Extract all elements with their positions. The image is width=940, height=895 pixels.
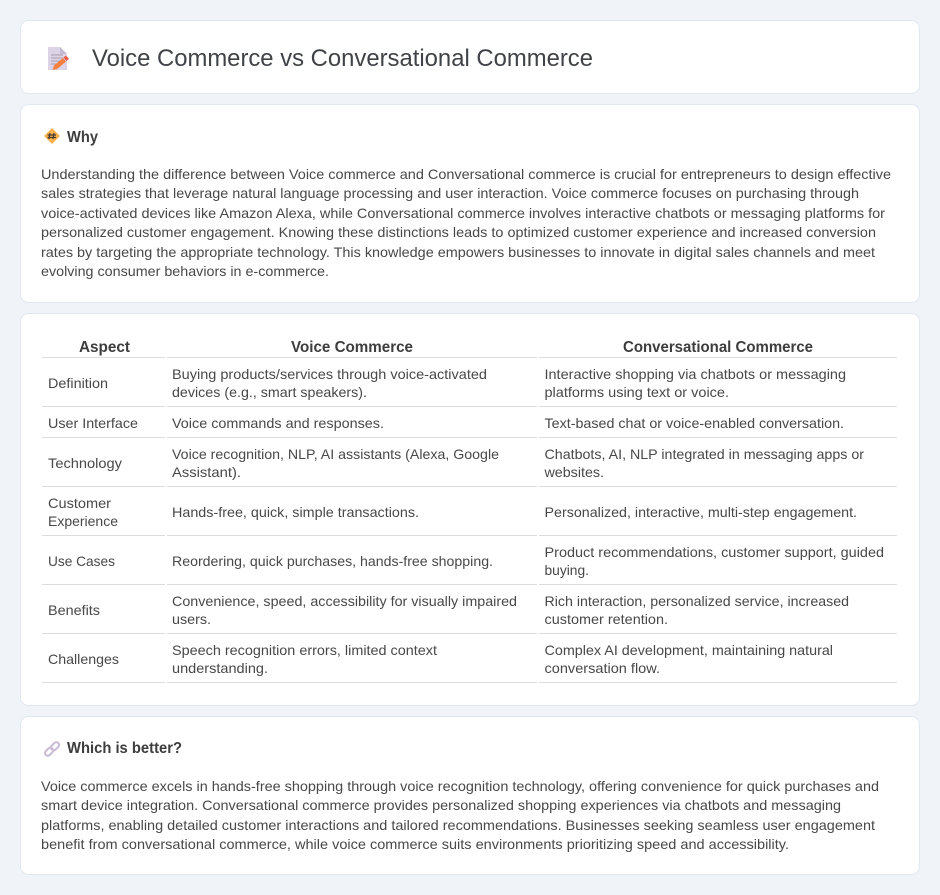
row: customer experience: Personalized, interactive, multi-step engagement.	[544, 504, 857, 520]
row: benefits: Rich interaction, personalized service, increased	[544, 593, 849, 609]
row: use cases: buying.	[544, 562, 589, 578]
text block: which is better paragraph: smart device integration. Conversational commerce provides personalized shopping experiences via chatbots and messaging	[41, 797, 841, 813]
text block: which is better paragraph: Voice commerce excels in hands-free shopping through voice recognition technology, offering convenience for quick purchases and	[41, 778, 879, 794]
icon: document with pencil	[48, 47, 69, 70]
row: challenges	[48, 642, 833, 676]
row: customer experience: Hands-free, quick, simple transactions.	[172, 504, 419, 520]
row: challenges: conversation flow.	[544, 660, 660, 676]
row: benefits: Benefits	[48, 602, 100, 618]
row: definition: Buying products/services through voice-activated	[172, 366, 487, 382]
text block: why paragraph: rates by targeting the appropriate technology. This knowledge empowers businesses to innovate in digital sales channels and meet	[41, 244, 875, 260]
row: definition: Interactive shopping via chatbots or messaging	[544, 366, 846, 382]
row: benefits: Convenience, speed, accessibility for visually impaired	[172, 593, 517, 609]
row: customer experience: Customer	[48, 495, 111, 511]
panel: why	[20, 104, 920, 302]
panel: title header	[20, 20, 920, 94]
table header row: Conversational Commerce	[623, 339, 813, 356]
row: user interface: User Interface	[48, 415, 138, 431]
row: definition: platforms using text or voice.	[544, 384, 729, 400]
icon: chain link	[44, 741, 60, 757]
text block: why paragraph: voice-activated devices like Amazon Alexa, while Conversational commerce involves interactive chatbots or messaging platforms for	[41, 205, 885, 221]
text block: why paragraph: sales strategies that leverage natural language processing and user interaction. Voice commerce focuses on purchasing through	[41, 185, 859, 201]
row: technology	[48, 446, 864, 480]
row: technology: Technology	[48, 455, 122, 471]
row: challenges: Complex AI development, maintaining natural	[544, 642, 833, 658]
text block: why paragraph: evolving consumer behaviors in e-commerce.	[41, 263, 329, 279]
panel: which is better	[20, 716, 920, 874]
row: benefits: users.	[172, 611, 211, 627]
row: customer experience: Experience	[48, 513, 118, 529]
text block: which is better paragraph: platforms, enabling detailed customer interactions and tailored recommendations. Businesses seeking seamless user engagement	[41, 817, 875, 833]
table header row: Aspect	[79, 339, 131, 356]
text block: why paragraph: Understanding the difference between Voice commerce and Conversational commerce is crucial for entrepreneurs to design effective	[41, 166, 891, 182]
row: technology: websites.	[543, 464, 604, 480]
text block: why paragraph	[41, 166, 891, 279]
row: use cases: Product recommendations, customer support, guided	[544, 544, 884, 560]
row: definition: Definition	[48, 375, 108, 391]
row: benefits	[48, 593, 849, 627]
row: use cases	[48, 544, 884, 578]
row: challenges: understanding.	[172, 660, 268, 676]
text block: which is better paragraph: benefit from conversational commerce, while voice commerce suits environments prioritizing speed and accessibility.	[41, 836, 789, 852]
row: user interface: Text-based chat or voice-enabled conversation.	[544, 415, 844, 431]
title: Voice Commerce vs Conversational Commerce	[92, 45, 593, 72]
row: use cases: Use Cases	[48, 553, 115, 569]
icon: diamond road sign	[44, 128, 60, 144]
row: benefits: customer retention.	[544, 611, 668, 627]
text block: why paragraph: personalized customer engagement. Knowing these distinctions leads to optimized customer experience and increased conversion	[41, 224, 876, 240]
row: challenges: Challenges	[48, 651, 119, 667]
text block: which is better paragraph	[41, 778, 879, 852]
row: technology: Voice recognition, NLP, AI assistants (Alexa, Google	[172, 446, 499, 462]
heading: why: Why	[67, 129, 98, 146]
row: technology: Assistant).	[172, 464, 241, 480]
panel: comparison table	[20, 314, 920, 706]
row: challenges: Speech recognition errors, limited context	[172, 642, 437, 658]
row: user interface	[48, 415, 844, 431]
table header row	[79, 339, 813, 356]
row: technology: Chatbots, AI, NLP integrated in messaging apps or	[544, 446, 864, 462]
row: definition: devices (e.g., smart speakers).	[172, 384, 367, 400]
table header row: Voice Commerce	[291, 339, 413, 356]
heading: which is better: Which is better?	[67, 740, 182, 757]
row: user interface: Voice commands and responses.	[172, 415, 384, 431]
row: use cases: Reordering, quick purchases, hands-free shopping.	[172, 553, 493, 569]
row: definition	[48, 366, 846, 400]
row: customer experience	[48, 495, 857, 529]
